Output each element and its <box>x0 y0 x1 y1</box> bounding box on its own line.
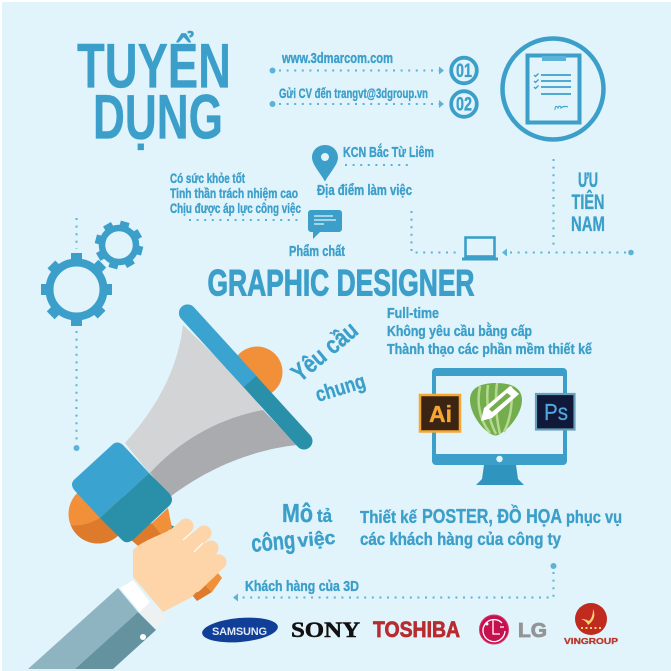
badge 01: 01 <box>456 61 472 82</box>
label: job description: công <box>250 526 296 558</box>
location text <box>317 143 434 199</box>
label: job description: Mô <box>282 498 313 528</box>
megaphone body <box>72 442 172 542</box>
title: DỤNG <box>93 82 223 152</box>
general requirements list: Không yêu cầu bằng cấp <box>387 322 532 340</box>
label: job description: tả <box>317 506 333 526</box>
badge 02 <box>451 91 477 117</box>
location text: KCN Bắc Từ Liêm <box>343 143 434 161</box>
general requirements list: Thành thạo các phần mềm thiết kế <box>387 341 593 358</box>
qualities text <box>170 170 301 220</box>
label: general requirements <box>286 316 368 407</box>
label: job description <box>250 498 337 558</box>
hand <box>133 522 224 612</box>
qualities text: Tinh thần trách nhiệm cao <box>170 185 298 201</box>
megaphone cone <box>125 325 297 497</box>
megaphone rim <box>188 313 304 441</box>
step 1: website <box>270 51 444 74</box>
icon: clipboard <box>502 38 604 140</box>
logo: Sony: SONY <box>291 617 360 642</box>
label: priority male <box>571 169 605 236</box>
label: general requirements: chung <box>313 370 368 407</box>
logo: Samsung <box>201 615 279 645</box>
logo: Toshiba: TOSHIBA <box>373 617 460 642</box>
badge 01 <box>451 58 477 83</box>
title: TUYỂN <box>77 30 231 102</box>
location text: Địa điểm làm việc <box>317 183 412 199</box>
icon: laptop <box>462 238 498 260</box>
title <box>77 30 231 152</box>
icon: speech bubble <box>308 210 342 239</box>
icon: Adobe Illustrator: Ai <box>429 401 452 427</box>
logo: Samsung: SAMSUNG <box>212 626 268 638</box>
step 1: website: www.3dmarcom.com <box>281 51 393 67</box>
dotted connector left <box>74 218 80 451</box>
dotted connector middle <box>412 211 458 252</box>
dotted connector right <box>502 159 634 256</box>
logo: LG <box>480 615 547 644</box>
megaphone trigger <box>125 508 175 550</box>
label: general requirements: Yêu cầu <box>286 316 364 388</box>
small orange grip <box>192 573 222 601</box>
megaphone front dome <box>232 346 282 398</box>
icon: Photoshop <box>536 394 574 430</box>
jacket sleeve <box>28 588 156 669</box>
icon: location pin <box>312 145 338 182</box>
label: job description: việc <box>297 528 337 552</box>
general requirements list <box>387 305 593 358</box>
label: priority male: NAM <box>571 213 605 236</box>
label: priority male: TIÊN <box>572 190 604 214</box>
dotted connector bottom <box>233 563 556 602</box>
job description text: các khách hàng của công ty <box>360 529 561 549</box>
heading: job title: GRAPHIC DESIGNER <box>208 262 474 304</box>
logo: Vingroup <box>564 603 618 646</box>
label: qualities: Phẩm chất <box>289 244 345 260</box>
qualities text: Có sức khỏe tốt <box>170 170 245 186</box>
step 2: email <box>270 86 444 108</box>
icon: monitor <box>432 368 567 485</box>
job description text: POSTER, ĐỒ HỌA <box>422 504 562 528</box>
icon: Adobe Illustrator <box>420 395 460 432</box>
icon: CorelDRAW <box>470 383 522 436</box>
sleeve cuff <box>120 580 167 628</box>
step 2: email: Gửi CV đến trangvt@3dgroup.vn <box>279 86 428 101</box>
job description text: Thiết kế <box>360 507 417 527</box>
qualities text: Chịu được áp lực công việc <box>170 200 301 216</box>
label: priority male: ƯU <box>578 169 598 192</box>
general requirements list: Full-time <box>387 305 439 322</box>
icon: gears <box>26 212 152 340</box>
logo: Vingroup: VINGROUP <box>564 636 618 646</box>
logo: LG: LG <box>518 620 547 642</box>
badge 02: 02 <box>456 94 472 116</box>
icon: Photoshop: Ps <box>544 399 568 425</box>
job description text: phục vụ <box>566 507 622 527</box>
megaphone rear dome <box>68 493 122 544</box>
illustration: hand and megaphone <box>28 313 304 669</box>
job description text <box>360 504 622 549</box>
label: clients: Khách hàng của 3D <box>245 579 359 595</box>
